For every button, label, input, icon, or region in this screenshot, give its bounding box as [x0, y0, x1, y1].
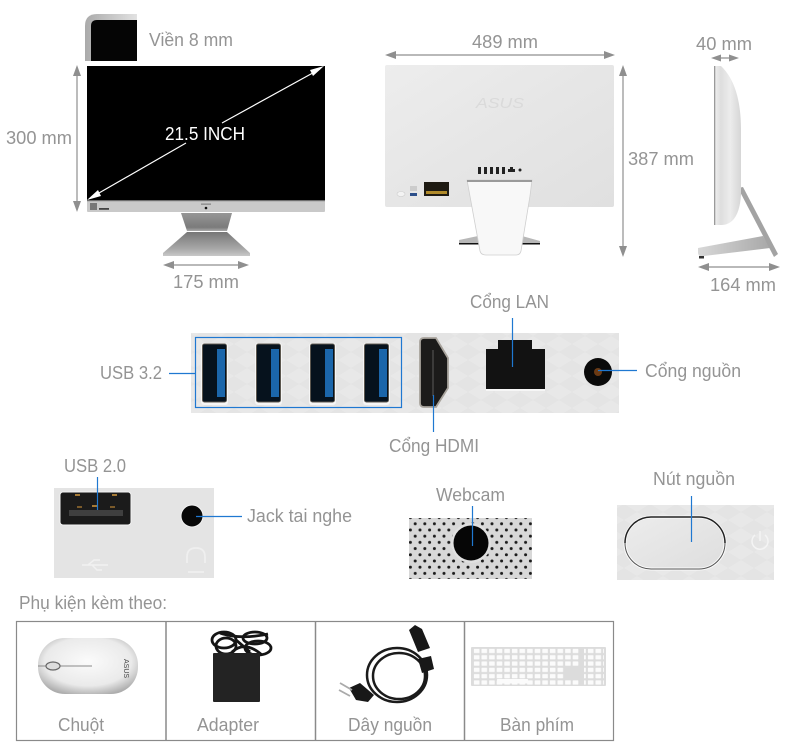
panel: rear ports [100, 292, 741, 456]
monitor rear: ASUS [475, 95, 524, 112]
label: LAN [470, 292, 549, 367]
cell: mouse: Chuột [58, 715, 104, 735]
icon: bezel close-up [85, 14, 137, 61]
monitor front [87, 66, 325, 256]
power button background [617, 505, 774, 580]
power button [625, 517, 725, 569]
USB 2.0 port [60, 492, 131, 525]
webcam lens [451, 523, 491, 563]
label: power button [653, 469, 735, 542]
arrow: width [385, 51, 615, 59]
panel: side ports [54, 456, 352, 578]
label: USB 2.0 [64, 456, 126, 510]
icon: power symbol [752, 531, 768, 549]
arrow: height [619, 65, 627, 257]
arrow: height [73, 65, 81, 212]
label: HDMI: Cổng HDMI [389, 436, 479, 456]
label: base width: 175 mm [173, 272, 239, 292]
HDMI port [420, 338, 448, 407]
USB 3.2 highlight box [196, 338, 402, 408]
USB 3.2 ports [201, 343, 390, 405]
arrow: base width [163, 261, 249, 269]
side port background [54, 488, 214, 578]
panel: side view [696, 34, 780, 295]
cell: power cord [339, 625, 434, 735]
port panel background [191, 333, 619, 413]
cell: keyboard: Bàn phím [500, 715, 574, 735]
label: diagonal size: 21.5 INCH [165, 124, 245, 144]
label: webcam: Webcam [436, 485, 505, 505]
cell: keyboard [471, 647, 606, 735]
panel: power button [617, 469, 774, 580]
panel: front view [6, 14, 325, 292]
label: HDMI [389, 395, 479, 456]
icon: headphones [187, 548, 205, 572]
panel: rear view [385, 32, 694, 257]
label: LAN: Cổng LAN [470, 292, 549, 312]
label: USB 2.0: USB 2.0 [64, 456, 126, 476]
panel: webcam [409, 485, 532, 579]
panel: accessories [16, 593, 614, 741]
label: height: 300 mm [6, 128, 72, 148]
label: width: 489 mm [472, 32, 538, 52]
accessories table frame [16, 621, 614, 741]
label: depth: 40 mm [696, 34, 752, 54]
headphone jack [181, 505, 203, 527]
label: bezel: Viền 8 mm [149, 30, 233, 50]
label: height: 387 mm [628, 149, 694, 169]
arrow: screen diagonal [87, 66, 324, 200]
label: USB 3.2: USB 3.2 [100, 363, 162, 383]
LAN port [486, 340, 545, 391]
icon: USB symbol [82, 560, 108, 570]
cell: adapter: Adapter [197, 715, 259, 735]
power jack [584, 358, 612, 386]
label: power port: Cổng nguồn [645, 361, 741, 381]
heading: accessories: Phụ kiện kèm theo: [19, 593, 167, 613]
label: base depth: 164 mm [710, 275, 776, 295]
cell: mouse: ASUS [122, 659, 129, 678]
cell: adapter [197, 632, 271, 735]
monitor side [698, 66, 778, 258]
label: power button: Nút nguồn [653, 469, 735, 489]
webcam background [409, 518, 532, 579]
arrow: base depth [698, 263, 780, 271]
monitor rear [385, 65, 614, 255]
arrow: depth [711, 54, 739, 62]
cell: power cord: Dây nguồn [348, 715, 432, 735]
cell: mouse [38, 638, 138, 735]
label: headphone jack: Jack tai nghe [247, 506, 352, 526]
